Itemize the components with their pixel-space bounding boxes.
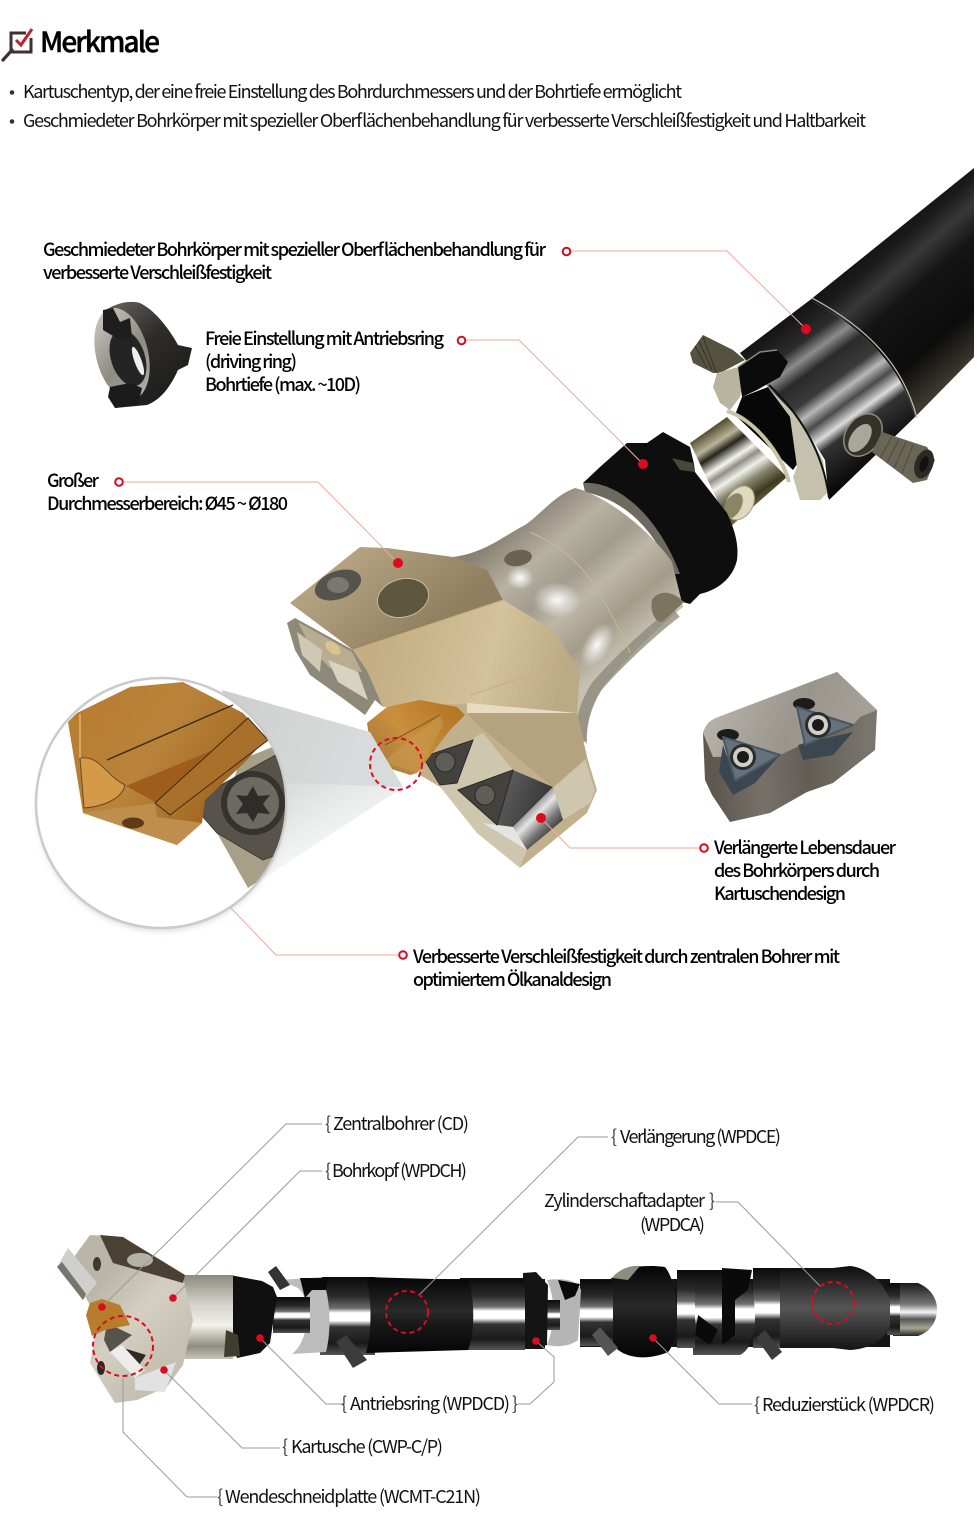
head screw and hole xyxy=(311,564,433,623)
screw xyxy=(592,1327,618,1356)
callout: forged body: Geschmiedeter Bohrkörper mit spezieller Oberflächenbehandlung für xyxy=(43,236,547,262)
insert xyxy=(793,698,853,760)
first crescent xyxy=(280,1277,329,1354)
leader: Bohrkopf xyxy=(169,1171,322,1302)
bullet list: Geschmiedeter Bohrkörper mit spezieller Oberflächenbehandlung für verbesserte Verschleißfestigkeit und Haltbarkeit xyxy=(23,107,866,133)
threaded hole xyxy=(836,406,890,464)
magnifier cone xyxy=(222,690,403,887)
callout: driving ring: Freie Einstellung mit Antriebsring xyxy=(205,325,445,351)
bullet list xyxy=(10,78,866,133)
leader: Antriebsring xyxy=(256,1334,554,1404)
leader: Reduzierstueck xyxy=(649,1334,752,1404)
gold tip xyxy=(86,1299,130,1336)
callout: cartridge design: Kartuschendesign xyxy=(714,880,846,906)
drill head neck xyxy=(453,488,683,745)
callout: driving ring: Bohrtiefe (max. ~10D) xyxy=(205,371,361,397)
bullet list: Kartuschentyp, der eine freie Einstellung des Bohrdurchmessers und der Bohrtiefe ermöglicht xyxy=(23,78,682,104)
callout: diameter range xyxy=(47,467,288,516)
label: Kartusche: Kartusche (CWP-C/P) xyxy=(291,1433,443,1459)
label: Reduzierstueck: Reduzierstück (WPDCR) xyxy=(762,1391,935,1417)
leader: central drill xyxy=(231,908,407,959)
reducer body xyxy=(753,1266,890,1350)
product image: exploded drill assembly xyxy=(287,168,974,868)
callout: forged body: verbesserte Verschleißfestigkeit xyxy=(43,259,272,285)
callout: cartridge design xyxy=(713,834,897,906)
leader: driving ring xyxy=(458,337,648,469)
neck holes xyxy=(503,548,684,622)
red dashed detail circle xyxy=(370,738,422,790)
label: Wendeschneidplatte: Wendeschneidplatte (WCMT-C21N) xyxy=(225,1483,481,1509)
dark underlay xyxy=(320,1279,890,1349)
label: Verlaengerung: Verlängerung (WPDCE) xyxy=(620,1123,781,1149)
insert xyxy=(717,729,780,795)
leader: Verlaengerung xyxy=(386,1137,608,1333)
label: Zylinderschaftadapter: Zylinderschaftadapter xyxy=(544,1187,706,1213)
callout: cartridge design: des Bohrkörpers durch xyxy=(714,857,880,883)
callout: central drill: optimiertem Ölkanaldesign xyxy=(413,966,612,992)
label: Zylinderschaftadapter: (WPDCA) xyxy=(640,1211,705,1237)
label: Verlaengerung: { xyxy=(611,1123,617,1149)
second tube xyxy=(580,1280,613,1346)
head middle face xyxy=(353,600,580,713)
callout: central drill: Verbesserte Verschleißfestigkeit durch zentralen Bohrer mit xyxy=(412,943,840,969)
second ring xyxy=(523,1272,548,1349)
title: Merkmale xyxy=(40,21,160,61)
callout: diameter range: Großer xyxy=(47,467,100,493)
sleeve face slot xyxy=(713,350,829,500)
neck lower shading xyxy=(581,612,676,742)
shank xyxy=(893,1283,937,1336)
second crescent xyxy=(547,1279,581,1346)
label: Zylinderschaftadapter xyxy=(544,1187,715,1237)
flange xyxy=(677,1270,695,1348)
chrome face with red target xyxy=(513,787,563,850)
callout: diameter range: Durchmesserbereich: Ø45 ~ Ø180 xyxy=(47,490,288,516)
icon: checklist magnifier xyxy=(3,29,32,60)
neck xyxy=(183,1275,233,1359)
image: cartridge with inserts xyxy=(703,672,877,822)
main tube xyxy=(460,1278,525,1350)
neck highlights xyxy=(506,532,630,672)
label: Zylinderschaftadapter: } xyxy=(709,1187,715,1213)
label: Antriebsring: { xyxy=(341,1390,347,1416)
left cartridge xyxy=(287,618,383,715)
callout: driving ring xyxy=(205,325,445,397)
leader: Zentralbohrer xyxy=(98,1124,322,1311)
label: Antriebsring: Antriebsring (WPDCD) xyxy=(350,1390,510,1416)
callout: forged body xyxy=(43,236,547,285)
leader: Zylinderschaftadapter xyxy=(716,1202,854,1324)
head top surface xyxy=(290,547,503,650)
head inserts xyxy=(57,1248,176,1392)
image: driving ring xyxy=(85,302,192,408)
magnifier lens xyxy=(36,678,290,931)
chrome shaft xyxy=(690,417,787,527)
label: Kartusche: { xyxy=(282,1433,288,1459)
black drill tube xyxy=(810,168,974,417)
drill head body xyxy=(68,1235,193,1403)
upper adjusting screw xyxy=(690,335,745,373)
label: Wendeschneidplatte: { xyxy=(217,1483,223,1509)
chrome sleeve band xyxy=(740,300,915,500)
leader: cartridge design xyxy=(536,813,708,852)
callout: cartridge design: Verlängerte Lebensdauer xyxy=(713,834,897,860)
leader: forged body xyxy=(563,248,811,334)
lower adjusting screw xyxy=(872,432,938,483)
leader: diameter range xyxy=(115,478,403,568)
label: Bohrkopf: { xyxy=(325,1157,331,1183)
leader: Kartusche xyxy=(160,1366,280,1448)
head lower body xyxy=(367,670,597,868)
screw xyxy=(756,1330,782,1360)
label: Bohrkopf: Bohrkopf (WPDCH) xyxy=(332,1157,467,1183)
gold central drill tip xyxy=(367,700,465,775)
screws xyxy=(268,1266,367,1368)
enlarged insert xyxy=(202,747,285,888)
enlarged gold tip xyxy=(68,682,268,845)
seat and inserts xyxy=(423,733,595,868)
black ring xyxy=(230,1275,277,1358)
callout: central drill xyxy=(412,943,840,992)
product image: assembled drill xyxy=(57,1235,937,1403)
label: Zentralbohrer: { xyxy=(325,1110,331,1136)
leader: Wendeschneidplatte xyxy=(93,1316,217,1497)
clamp section xyxy=(693,1270,755,1355)
label: Zentralbohrer: Zentralbohrer (CD) xyxy=(333,1110,469,1136)
callout: driving ring: (driving ring) xyxy=(205,348,297,374)
label: Antriebsring: } xyxy=(512,1390,518,1416)
label: Reduzierstueck: { xyxy=(754,1391,760,1417)
driving ring xyxy=(583,432,738,604)
